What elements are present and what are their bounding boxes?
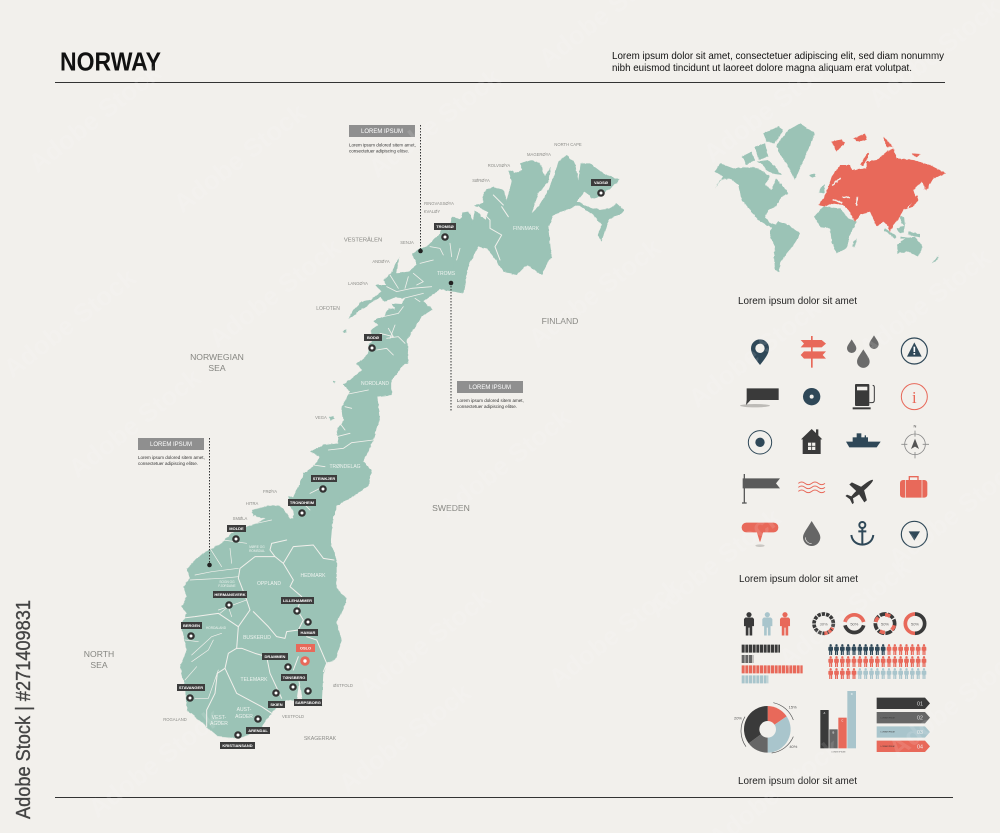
arrow 02: LOREM IPSUM [881, 717, 895, 719]
icon: disc [803, 388, 820, 405]
stock watermark: Adobe Stock [333, 677, 477, 799]
people pictogram [828, 644, 926, 679]
sea and neighbour labels: ROLVSØYA [488, 163, 510, 168]
sea and neighbour labels: ØSTFOLD [333, 683, 353, 688]
caption: charts: Lorem ipsum dolor sit amet [738, 775, 857, 787]
Madagascar [852, 238, 857, 247]
city: Bodø [364, 334, 382, 352]
icon: flag [742, 474, 780, 504]
city: Tromsø [434, 223, 456, 241]
bar chart: B [832, 730, 834, 734]
pie chart: 15% [789, 705, 797, 710]
arrow 04: 04 [917, 744, 923, 750]
New Zealand [932, 255, 938, 263]
city: Trondheim [288, 499, 316, 517]
city: Stavanger: STAVANGER [179, 685, 203, 690]
stock watermark: Adobe Stock [643, 502, 787, 624]
city: Tromsø: TROMSØ [436, 224, 454, 229]
icon: warning [901, 338, 927, 364]
county labels: FJORDANE [218, 584, 236, 588]
Arctic islands [742, 127, 783, 175]
icon: fuel pump [853, 384, 874, 409]
arrow 04: LOREM IPSUM [881, 746, 895, 748]
callout: north: Lorem ipsum dolored sitem amet, [349, 142, 416, 148]
row 2 [828, 656, 926, 667]
stock watermark: Adobe Stock [0, 262, 142, 384]
pie chart: 40% [789, 744, 798, 749]
Arctic and Pacific islands, highlighted [832, 133, 930, 208]
south Norway landmass [180, 497, 347, 738]
icon: airplane [841, 471, 880, 509]
city: Bergen: BERGEN [183, 623, 200, 628]
stock credit: Adobe Stock | #271409831 [13, 600, 35, 819]
city: Tønsberg: TØNSBERG [283, 675, 305, 680]
inland seas [833, 178, 857, 205]
donut percentages [820, 621, 919, 626]
city: Drammen [262, 653, 292, 671]
city: Skien [268, 689, 285, 708]
city: Steinkjer: STEINKJER [313, 476, 335, 481]
city: Sarpsborg: SARPSBORG [295, 700, 321, 705]
city: Bergen [181, 622, 202, 640]
county labels: VEST- [212, 715, 227, 721]
icon: map pin [751, 339, 769, 365]
stock watermark: Adobe Stock [363, 62, 507, 184]
donut: split [875, 614, 895, 633]
arrow 03: 03 [917, 730, 923, 736]
header text: Lorem ipsum dolor sit amet, consectetuer adipiscing elit, sed diam nonummy [612, 50, 945, 62]
callout: north: LOREM IPSUM [361, 129, 403, 135]
stock watermark: Adobe Stock [168, 97, 312, 219]
sea and neighbour labels: KVALØY [424, 209, 440, 214]
arrow list [877, 698, 930, 752]
callout: west coast: consectetuer adipiscing elitse. [138, 461, 198, 466]
callout: west coast: Lorem ipsum dolored sitem amet, [138, 455, 205, 460]
icon: anchor [851, 522, 873, 545]
central Norway landmass [293, 320, 408, 520]
icon: ship [846, 433, 881, 447]
county labels: OPPLAND [257, 581, 281, 587]
donut: half [905, 614, 925, 633]
arrow 03 [877, 726, 930, 738]
county labels: FINNMARK [513, 226, 540, 232]
donut charts [814, 614, 925, 633]
bar chart: A [823, 711, 825, 715]
county labels: AGDER [235, 714, 253, 720]
city: Skien: SKIEN [270, 702, 283, 707]
capital: Oslo: OSLO [300, 646, 311, 650]
stock watermark: Adobe Stock [83, 702, 227, 824]
North America [715, 163, 788, 229]
capital: Oslo [296, 644, 315, 666]
segmented bars [742, 649, 803, 679]
sea and neighbour labels: LOFOTEN [316, 306, 340, 312]
icon: information: i [912, 388, 917, 407]
sea and neighbour labels: HITRA [246, 501, 258, 506]
icon: suitcase [900, 477, 927, 498]
fjords and county borders: south [180, 540, 334, 727]
arrow 02 [877, 712, 930, 723]
sea and neighbour labels: SKAGERRAK [304, 736, 337, 742]
Iceland and UK [809, 173, 825, 193]
icon: three drops [847, 335, 879, 368]
title: NORWAY [60, 46, 161, 76]
county labels: ROMSDAL [249, 549, 265, 553]
pie chart [734, 703, 798, 753]
donut percentages: 50% [911, 621, 919, 626]
city: Drammen: DRAMMEN [265, 654, 286, 659]
city: Hermansverk: HERMANSVERK [214, 592, 246, 597]
stock watermark: Adobe Stock [773, 552, 917, 674]
sea and neighbour labels: VESTFOLD [282, 714, 304, 719]
Africa [814, 207, 857, 253]
bar chart: LOREM IPSUM [831, 752, 846, 754]
county labels: HEDMARK [300, 573, 326, 579]
fjords and county borders: central [303, 328, 393, 510]
fjords and county borders: Finnmark [478, 195, 508, 260]
city: Kristiansand [220, 731, 255, 749]
caption: world map: Lorem ipsum dolor sit amet [738, 295, 857, 307]
stock watermark: Adobe Stock [433, 402, 577, 524]
donut: segmented [814, 614, 833, 633]
city: Hamar: HAMAR [301, 630, 316, 635]
callout: Troms: LOREM IPSUM [469, 385, 511, 391]
callout: Troms: consectetuer adipiscing elitse. [457, 404, 517, 409]
city: Bodø: BODØ [367, 335, 379, 340]
city: Hermansverk [213, 591, 247, 609]
sea and neighbour labels: SWEDEN [432, 503, 470, 513]
South America [770, 222, 800, 272]
icon: large drop [803, 521, 820, 546]
sea and neighbour labels: RINGVASSØYA [424, 201, 454, 206]
stock watermark: Adobe Stock [683, 292, 827, 414]
arrow 02: 02 [917, 716, 923, 722]
header text [612, 50, 945, 74]
Eurasia, highlighted [818, 148, 946, 232]
callout: north: consectetuer adipiscing elitse. [349, 148, 409, 154]
city: Sarpsborg [294, 687, 322, 706]
sea and neighbour labels: LANGØYA [348, 281, 368, 286]
icon: compass [901, 424, 929, 458]
stock watermark: Adobe Stock [523, 232, 667, 354]
city: Lillehammer [281, 597, 314, 615]
bar chart: D [851, 692, 853, 696]
donut percentages: 30% [820, 621, 828, 626]
sea and neighbour labels: MAGERØYA [527, 152, 551, 157]
header text: nibh euismod tincidunt ut laoreet dolore magna aliquam erat volutpat. [612, 62, 912, 74]
icon: down arrow [901, 521, 927, 547]
Finnmark landmass [453, 155, 624, 280]
callout: west coast: LOREM IPSUM [150, 442, 192, 448]
Australia [897, 237, 923, 257]
county labels: TRØNDELAG [329, 464, 361, 470]
county labels: AGDER [210, 721, 228, 727]
row 3 [828, 668, 926, 679]
sea and neighbour labels: NORTH [84, 649, 114, 659]
county labels: MØRE OG [249, 545, 265, 549]
county labels: NORDLAND [361, 381, 389, 387]
donut percentages: 50% [881, 621, 889, 626]
infographic charts [734, 612, 930, 754]
sea and neighbour labels: FRØYA [263, 489, 277, 494]
stock watermark: Adobe Stock [63, 362, 207, 484]
stock watermark: Adobe Stock [353, 582, 497, 704]
icon: information [901, 384, 927, 410]
city: Stavanger [177, 684, 205, 702]
city: Steinkjer [311, 475, 337, 493]
icon set [740, 335, 929, 547]
sea and neighbour labels: SEA [90, 660, 108, 670]
icon: compass: N [914, 424, 917, 429]
bar chart: C [841, 719, 843, 723]
stock watermark: Adobe Stock [543, 572, 687, 694]
stock watermark: Adobe Stock [853, 242, 997, 364]
county labels: AUST- [237, 707, 252, 713]
callout: north [349, 125, 423, 253]
sea and neighbour labels: VEGA [315, 415, 327, 420]
sea and neighbour labels: NORWEGIAN [190, 352, 244, 362]
icon: speech flag [740, 388, 779, 407]
row 1 [828, 644, 926, 655]
sea and neighbour labels: SØRØYA [472, 178, 490, 183]
county labels: TROMS [437, 271, 456, 277]
caption: icons: Lorem ipsum dolor sit amet [739, 573, 858, 585]
callout: west coast [138, 438, 212, 567]
sea and neighbour labels: FINLAND [542, 316, 578, 326]
arrow 03: LOREM IPSUM [881, 732, 895, 734]
bar chart [820, 691, 856, 754]
sea and neighbour labels: ROGALAND [163, 717, 187, 722]
icon: house [801, 429, 822, 454]
people icons [744, 612, 790, 635]
South-east Asia islands [884, 217, 920, 239]
icon: target [748, 431, 772, 454]
stock watermark: Adobe Stock [203, 232, 347, 354]
Troms and north Nordland landmass [343, 213, 480, 363]
city: Molde [227, 525, 246, 543]
fjords and county borders: north [383, 243, 460, 343]
county labels: TELEMARK [241, 677, 268, 683]
city: Molde: MOLDE [229, 526, 244, 531]
sea and neighbour labels: ANDØYA [372, 259, 390, 264]
pie chart: 20% [734, 716, 742, 721]
city: Arendal: ARENDAL [248, 728, 268, 733]
icon: waves [798, 482, 825, 493]
sea and neighbour labels: NORTH CAPE [554, 142, 582, 147]
city: Kristiansand: KRISTIANSAND [222, 743, 253, 748]
sea and neighbour labels: SENJA [400, 240, 414, 245]
callout: Troms [449, 281, 524, 411]
city: Vadsø [591, 179, 611, 197]
sea and neighbour labels [84, 142, 582, 742]
city: Vadsø: VADSØ [594, 180, 608, 185]
Greenland [777, 123, 815, 180]
city markers [177, 179, 611, 749]
stock watermark: Adobe Stock [698, 47, 842, 169]
city: Arendal [246, 715, 270, 734]
stock watermark: Adobe Stock [23, 57, 167, 179]
sea and neighbour labels: SEA [208, 363, 226, 373]
city: Hamar [298, 618, 318, 636]
world map [715, 123, 946, 272]
icon: red marker [742, 523, 778, 547]
donut percentages: 50% [850, 621, 859, 626]
county labels: SOGN OG [219, 580, 235, 584]
county labels: HORDALAND [206, 626, 227, 630]
city: Trondheim: TRONDHEIM [290, 500, 315, 505]
county labels [206, 226, 540, 727]
map: Norway [84, 142, 624, 749]
arrow 04 [877, 741, 930, 752]
donut: red top [845, 615, 864, 632]
callout: Troms: Lorem ipsum dolored sitem amet, [457, 398, 524, 403]
icon: signpost [801, 336, 826, 368]
city: Lillehammer: LILLEHAMMER [283, 598, 312, 603]
arrow 01: 01 [917, 701, 923, 707]
sea and neighbour labels: SMØLA [233, 516, 248, 521]
minor fjords: south [185, 520, 272, 698]
sea and neighbour labels: VESTERÅLEN [344, 236, 382, 244]
city: Tønsberg [281, 674, 307, 691]
county labels: BUSKERUD [243, 635, 271, 641]
